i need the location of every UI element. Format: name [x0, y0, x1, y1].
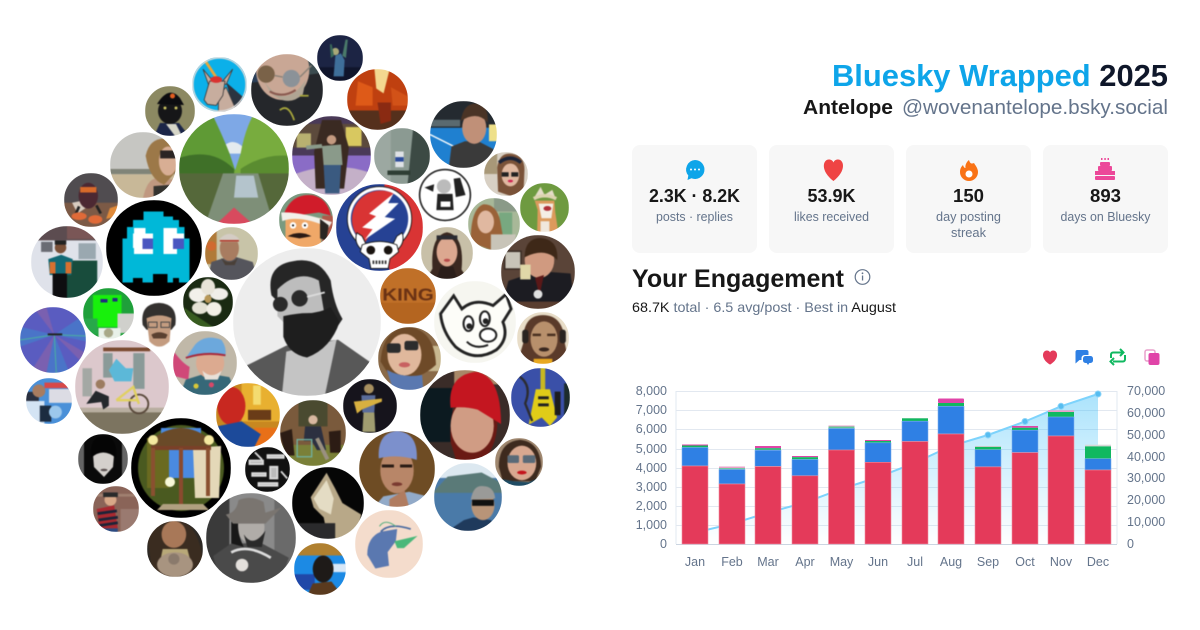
avatar: Grateful Dead steal your face [336, 184, 423, 271]
avatar: beach woman with curly hair [110, 132, 176, 198]
month labels: Oct [1015, 555, 1035, 569]
avatar: man in glasses with beanie [205, 227, 258, 280]
bar: Apr [792, 456, 818, 544]
avatar: man silhouette against blue [294, 543, 346, 595]
avatar: man with bear statue [292, 116, 371, 195]
avatar: man in striped shirt [93, 486, 139, 532]
bar: Jan [682, 444, 708, 544]
heading: your engagement: Your Engagement [632, 265, 845, 293]
bar: Oct [1012, 426, 1038, 544]
avatar: cartoon pig logo [434, 281, 516, 363]
cumulative area [695, 394, 1098, 544]
avatar: black and white football mascot [418, 168, 472, 222]
avatar: pixel cyan ghost [106, 200, 202, 296]
month labels: Aug [940, 555, 962, 569]
avatar: red-lit selfie in warm room [216, 383, 280, 447]
left axis labels: 2,000 [636, 499, 667, 513]
panel: day posting streak: day posting [936, 210, 1001, 224]
panel: day posting streak: 150 [953, 186, 984, 206]
left axis labels: 7,000 [636, 403, 667, 417]
avatar: main profile, bearded man in sunglasses [233, 248, 381, 396]
panel: posts and replies: posts · replies [656, 210, 733, 224]
panel: likes received [769, 145, 894, 253]
bar: May [828, 426, 854, 544]
icon: quotes squares [1145, 350, 1160, 365]
bar: Mar [755, 446, 781, 544]
avatar: black and white woman with bangs [78, 434, 128, 484]
left axis labels: 8,000 [636, 384, 667, 398]
panel: posts and replies: 2.3K · 8.2K [649, 186, 740, 206]
panel: days on Bluesky [1043, 145, 1168, 253]
chart: monthly engagement stacked bars with cumulative line [636, 384, 1165, 569]
bar: Feb [719, 466, 745, 544]
avatar bubble cluster [20, 35, 575, 595]
month labels: Feb [721, 555, 743, 569]
engagement summary: 68.7K total · 6.5 avg/post · Best in August [632, 299, 896, 315]
icon: reposts arrows [1110, 349, 1125, 365]
icon: likes heart [1043, 351, 1057, 365]
month labels [685, 555, 1109, 569]
panel: days on Bluesky: 893 [1090, 186, 1121, 206]
legend icons [1043, 349, 1160, 365]
avatar: white dog on black [292, 467, 364, 539]
title: Bluesky Wrapped 2025 [832, 58, 1168, 93]
panel: days on Bluesky: days on Bluesky [1060, 210, 1151, 224]
avatar: woman portrait with sunglasses on head [421, 227, 473, 279]
bar: Dec [1085, 445, 1111, 544]
month labels: Jan [685, 555, 705, 569]
right axis labels: 70,000 [1127, 384, 1165, 398]
avatar: red abstract fire [347, 69, 408, 130]
avatar: man with sunglasses by sea cliffs [434, 463, 502, 531]
right axis labels: 50,000 [1127, 428, 1165, 442]
left axis labels: 1,000 [636, 518, 667, 532]
avatar: woman holding cat [147, 521, 203, 577]
avatar: black and white man in hat [206, 493, 296, 583]
bar: Jul [902, 418, 928, 544]
avatar: surgeon in scrub cap [359, 431, 435, 507]
left axis labels: 4,000 [636, 461, 667, 475]
avatar: glasses woman with curly hair and scarf [378, 327, 441, 390]
right axis labels: 60,000 [1127, 406, 1165, 420]
right axis labels: 10,000 [1127, 515, 1165, 529]
avatar: man seated with two dogs [280, 400, 346, 466]
avatar: green pixel game [83, 288, 134, 339]
month labels: Nov [1050, 555, 1073, 569]
left axis labels [636, 384, 667, 551]
avatar: Georgia arch in black ring [131, 418, 231, 518]
month labels: Jun [868, 555, 888, 569]
avatar: woman with dark glasses [484, 152, 528, 196]
avatar: bottle under water sprinkler [374, 128, 430, 184]
icon: replies bubbles [1075, 350, 1093, 365]
left axis labels: 6,000 [636, 422, 667, 436]
avatar: black and white abstract clutter [245, 447, 290, 492]
avatar: woman with corgi flower crown [520, 183, 569, 232]
bar: Sep [975, 446, 1001, 544]
avatar: man on snow with teal jacket [31, 226, 103, 298]
avatar: stamped word KING on leather: KING [382, 284, 434, 304]
avatar: woman with teal glasses and red lips [495, 438, 543, 486]
bar: Jun [865, 440, 891, 544]
avatar: yellow flying V guitar [511, 368, 570, 427]
avatar: donkey with plunger [192, 57, 247, 112]
month labels: May [830, 555, 854, 569]
left axis labels: 0 [660, 537, 667, 551]
month labels: Dec [1087, 555, 1109, 569]
month labels: Apr [795, 555, 815, 569]
avatar: raisin figurine [64, 173, 118, 227]
panel: day posting streak: streak [951, 226, 987, 240]
grid lines [676, 391, 1117, 544]
profile name: Antelope [803, 96, 893, 119]
cumulative line [695, 394, 1098, 533]
panel: likes received: 53.9K [808, 186, 856, 206]
avatar: cat in Orioles cap [145, 86, 195, 136]
avatar: stamped word KING on leather [380, 268, 436, 324]
left axis labels: 5,000 [636, 442, 667, 456]
avatar: arena selfie man [430, 101, 497, 168]
avatar: woman with long hair by sign [468, 198, 520, 250]
panel: day posting streak [906, 145, 1031, 253]
avatar: man with bike by painted wall [75, 340, 169, 434]
icon: chat bubble [686, 160, 704, 180]
bar: Nov [1048, 410, 1074, 544]
icon: info [855, 270, 870, 284]
icon: heart [824, 160, 843, 181]
cumulative points [985, 391, 1101, 438]
avatar: Bob Belcher in Santa hat [279, 193, 333, 247]
avatar: man with mustache, cutout on white [142, 302, 176, 348]
avatar: man on guitar on dark stage [343, 379, 397, 433]
right axis labels: 0 [1127, 537, 1134, 551]
avatar: man with round sunglasses [251, 54, 323, 126]
avatar: woman in red knit hat [420, 370, 510, 460]
avatar: river kayak landscape [179, 114, 289, 224]
month labels: Sep [977, 555, 999, 569]
right axis labels: 40,000 [1127, 450, 1165, 464]
icon: cake [1095, 158, 1115, 180]
right axis labels [1127, 384, 1165, 551]
avatar: magnolia flower [183, 277, 233, 327]
avatar: man holding beer mug [501, 235, 575, 309]
avatar: cap man with floral shirt [173, 331, 237, 395]
panel: posts and replies [632, 145, 757, 253]
stacked bars [682, 398, 1111, 544]
right axis labels: 20,000 [1127, 493, 1165, 507]
avatar: blue kid with toys [26, 378, 72, 424]
panel: likes received: likes received [794, 210, 869, 224]
right axis labels: 30,000 [1127, 471, 1165, 485]
month labels: Jul [907, 555, 923, 569]
avatar: man in headphones sepia [517, 312, 569, 364]
avatar: blue shrimp embroidery [355, 510, 423, 578]
left axis labels: 3,000 [636, 480, 667, 494]
bar: Aug [938, 398, 964, 544]
icon: flame [960, 160, 978, 181]
avatar: concert stage [317, 35, 363, 81]
avatar: radial blue burst [20, 307, 86, 373]
profile handle: @wovenantelope.bsky.social [902, 96, 1168, 119]
month labels: Mar [757, 555, 779, 569]
